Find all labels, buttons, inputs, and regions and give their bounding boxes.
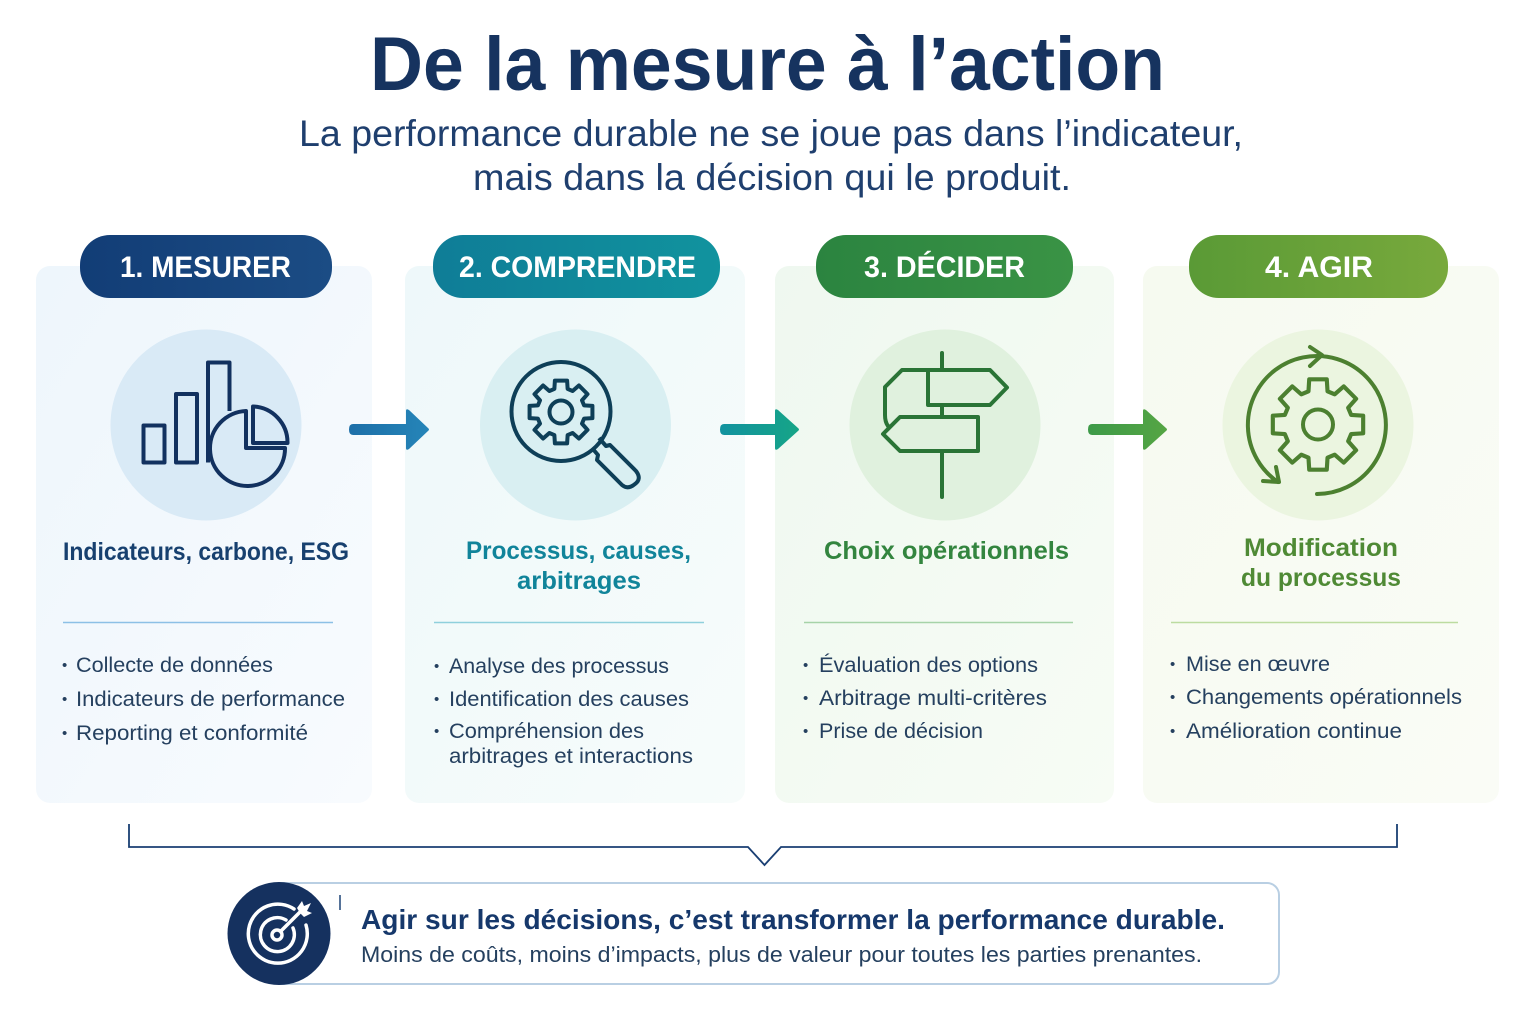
heading: choix: Choix opérationnels xyxy=(824,537,1069,565)
bullet list: mesurer: Indicateurs de performance xyxy=(76,688,345,711)
arrow: mesurer to comprendre xyxy=(349,409,429,450)
callout text: Moins de coûts, moins d’impacts, plus de valeur pour toutes les parties prenantes. xyxy=(361,942,1202,967)
bullet list: comprendre: arbitrages et interactions xyxy=(449,745,693,768)
bullet list: comprendre: Identification des causes xyxy=(449,688,689,711)
step badge: 3. décider xyxy=(816,235,1073,298)
panel: 2. comprendre xyxy=(405,235,745,803)
bullet list: comprendre: • xyxy=(434,658,439,675)
panel: 4. agir xyxy=(1143,235,1499,803)
icon: magnifier with gear xyxy=(480,330,671,520)
step badge: 2. comprendre: 2. COMPRENDRE xyxy=(459,251,696,284)
bullet list: agir: Changements opérationnels xyxy=(1186,686,1462,709)
bullet list: mesurer: • xyxy=(62,725,67,742)
subtitle: La performance durable ne se joue pas dans l’indicateur, xyxy=(299,113,1243,154)
callout box xyxy=(270,883,1279,984)
heading: modification: Modification xyxy=(1244,534,1398,562)
step badge: 4. agir: 4. AGIR xyxy=(1265,251,1373,284)
arrow: décider to agir xyxy=(1088,409,1167,450)
bullet list: agir: Amélioration continue xyxy=(1186,720,1402,743)
bullet list: mesurer xyxy=(62,654,345,745)
icon: signpost xyxy=(850,330,1040,520)
heading: processus xyxy=(466,537,691,595)
bullet list: décider: • xyxy=(803,723,808,740)
bullet list: décider: • xyxy=(803,657,808,674)
bullet list: décider: Prise de décision xyxy=(819,720,983,743)
bullet list: mesurer: Collecte de données xyxy=(76,654,273,677)
bullet list: décider xyxy=(803,654,1047,743)
heading: modification: du processus xyxy=(1241,564,1401,592)
callout xyxy=(228,882,1279,985)
icon: target with arrow xyxy=(228,882,330,985)
bullet list: agir: • xyxy=(1170,656,1175,673)
step badge: 1. mesurer xyxy=(80,235,332,298)
title: De la mesure à l’action xyxy=(370,22,1165,107)
subtitle: mais dans la décision qui le produit. xyxy=(473,157,1071,198)
bullet list: décider: Arbitrage multi-critères xyxy=(819,687,1047,710)
icon: bar chart and pie xyxy=(110,330,302,520)
bullet list: agir: • xyxy=(1170,689,1175,706)
panel: 1. mesurer xyxy=(36,235,372,803)
panel: 3. décider xyxy=(775,235,1114,803)
bullet list: comprendre: Compréhension des xyxy=(449,720,644,743)
heading: indicateurs: Indicateurs, carbone, ESG xyxy=(63,538,349,566)
heading: processus: Processus, causes, xyxy=(466,537,691,565)
heading: processus: arbitrages xyxy=(517,567,641,595)
bullet list: comprendre: Analyse des processus xyxy=(449,655,669,678)
heading: modification xyxy=(1241,534,1401,592)
step badge: 3. décider: 3. DÉCIDER xyxy=(864,250,1025,284)
bullet list: comprendre: • xyxy=(434,723,439,740)
icon: gear with cycle arrows xyxy=(1222,330,1414,520)
step badge: 4. agir xyxy=(1189,235,1448,298)
bullet list: comprendre: • xyxy=(434,691,439,708)
subtitle xyxy=(299,113,1243,198)
bullet list: décider: • xyxy=(803,690,808,707)
bullet list: mesurer: Reporting et conformité xyxy=(76,722,308,745)
bullet list: agir xyxy=(1170,653,1462,743)
bullet list: décider: Évaluation des options xyxy=(819,654,1038,677)
step badge: 1. mesurer: 1. MESURER xyxy=(120,251,291,284)
bullet list: mesurer: • xyxy=(62,691,67,708)
step badge: 2. comprendre xyxy=(433,235,720,298)
bullet list: mesurer: • xyxy=(62,657,67,674)
bullet list: agir: Mise en œuvre xyxy=(1186,653,1330,676)
callout heading: Agir sur les décisions, c’est transformer la performance durable. xyxy=(361,904,1225,935)
bullet list: comprendre xyxy=(434,655,693,768)
arrow: comprendre to décider xyxy=(720,409,799,450)
bullet list: agir: • xyxy=(1170,723,1175,740)
bracket xyxy=(129,824,1397,865)
